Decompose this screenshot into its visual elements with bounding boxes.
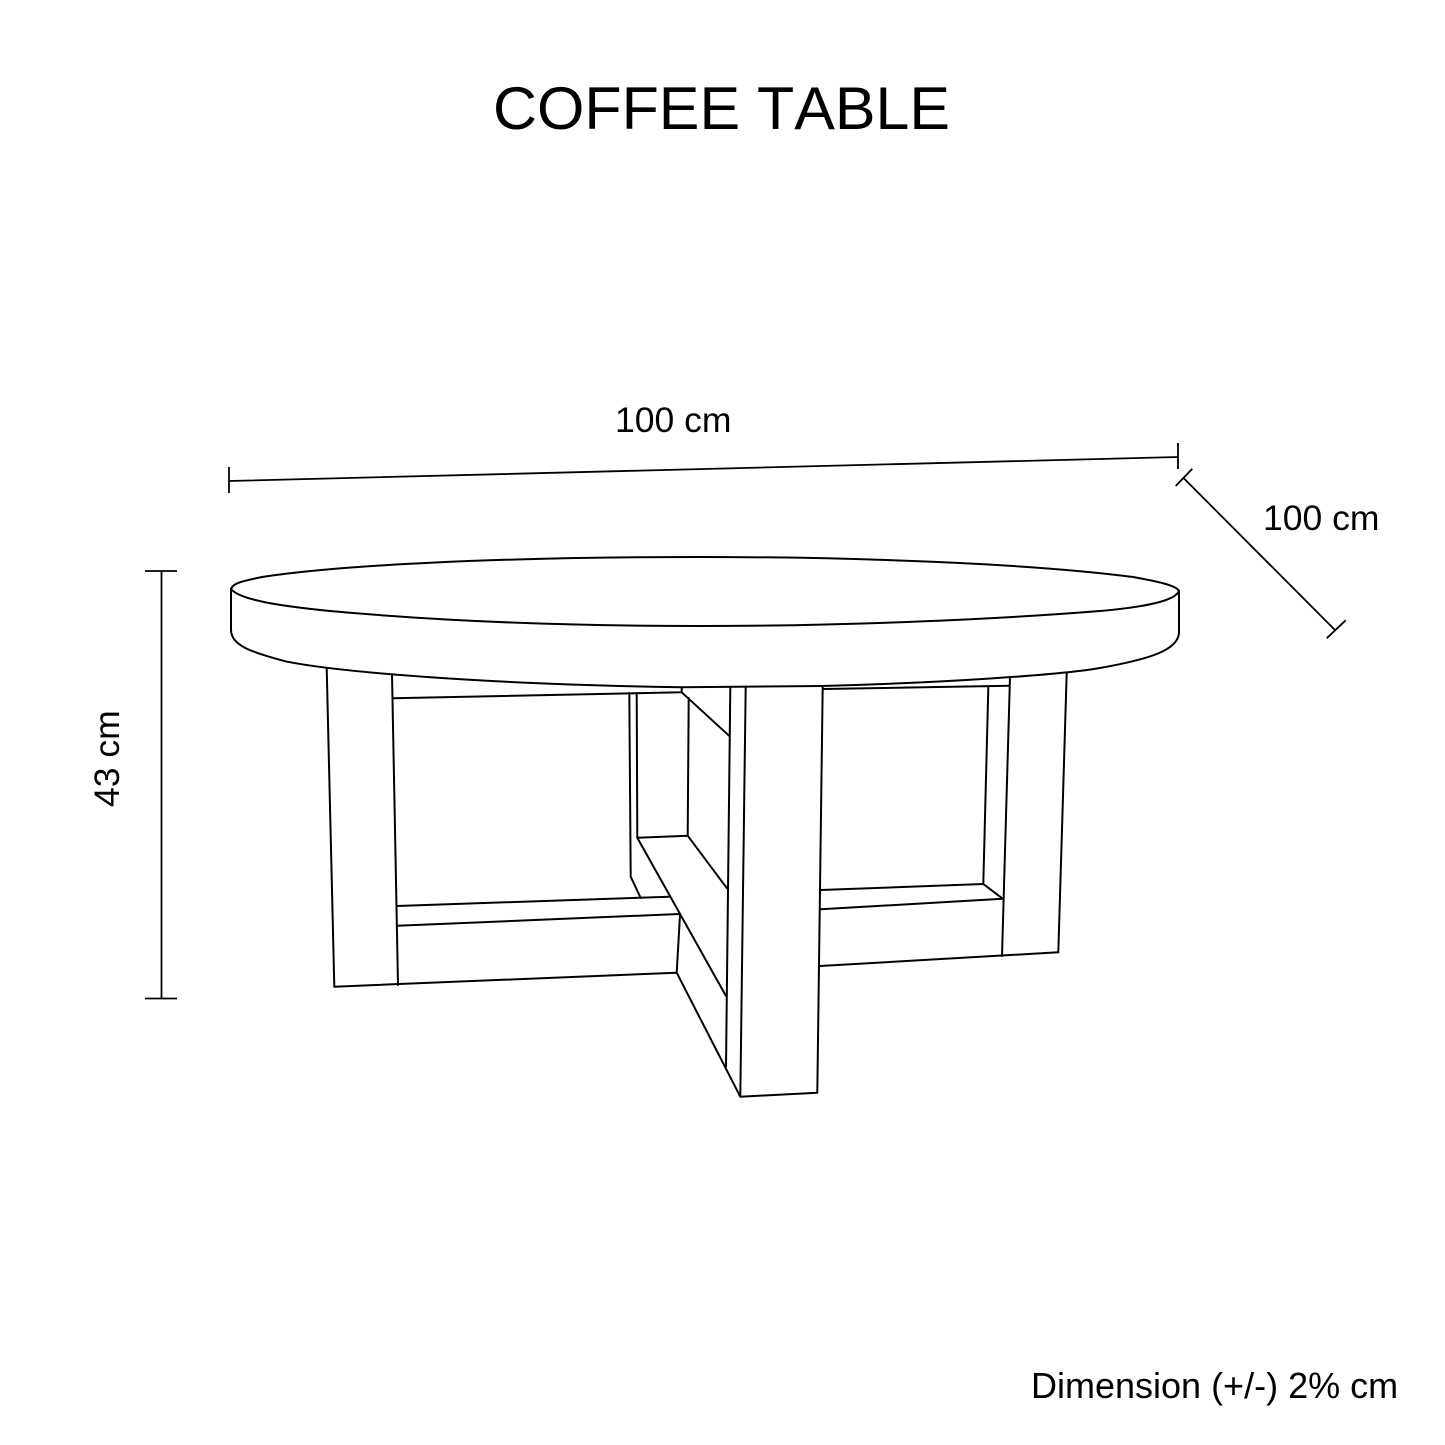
coffee table line drawing (231, 557, 1179, 1097)
height label: 43 cm (87, 710, 127, 807)
right leg (1002, 673, 1067, 956)
width dimension (229, 400, 1178, 493)
right frame rails (820, 686, 1058, 966)
depth label: 100 cm (1263, 498, 1379, 538)
title: COFFEE TABLE (493, 74, 950, 142)
center front leg (677, 686, 823, 1097)
round table top (231, 557, 1179, 687)
left frame rails (393, 688, 682, 973)
back leg (629, 692, 729, 898)
height dimension line (145, 571, 177, 998)
left leg (327, 668, 677, 987)
width label: 100 cm (615, 400, 731, 440)
width dimension line (229, 443, 1178, 493)
depth dimension line (1176, 469, 1346, 638)
center leg rail (637, 836, 727, 996)
dimension tolerance note: Dimension (+/-) 2% cm (1031, 1365, 1398, 1406)
height dimension (87, 571, 177, 998)
depth dimension (1176, 469, 1379, 638)
